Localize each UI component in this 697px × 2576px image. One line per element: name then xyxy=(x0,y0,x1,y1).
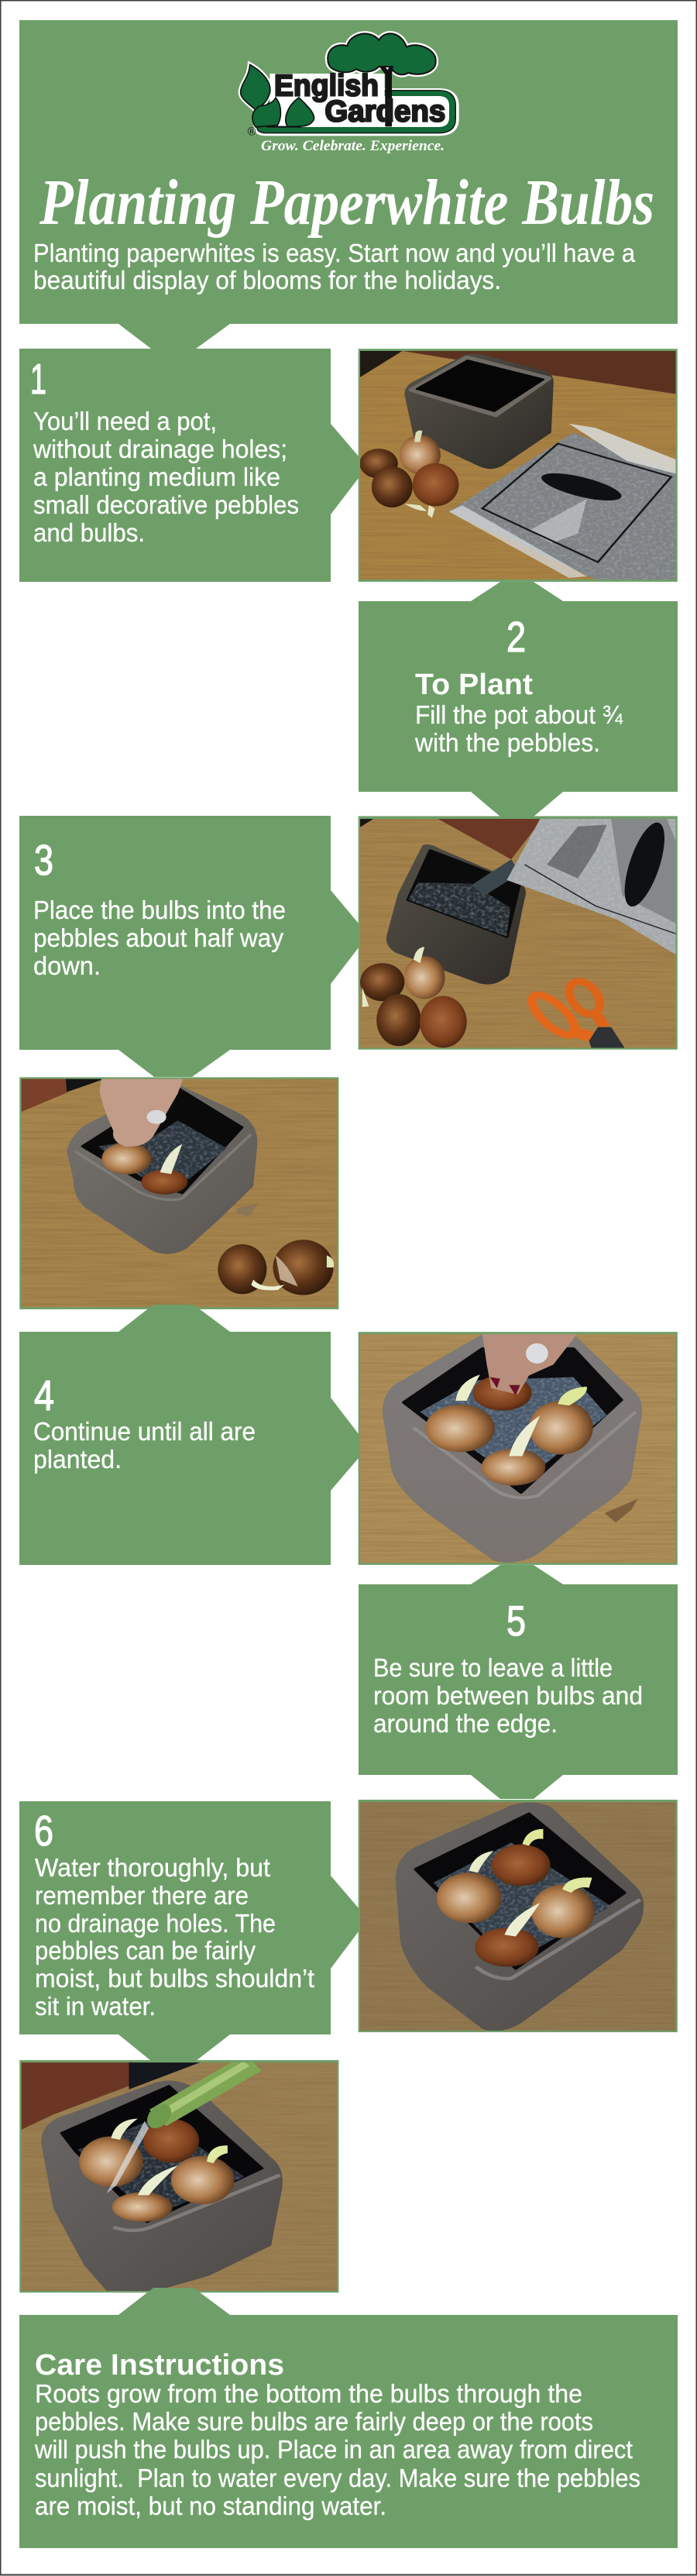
step number: 2 xyxy=(506,613,526,661)
step number: 1 xyxy=(30,355,46,403)
step text: room between bulbs and xyxy=(373,1681,643,1710)
photo 3: placing a bulb xyxy=(19,1077,338,1309)
step text: moist, but bulbs shouldn’t xyxy=(35,1964,314,1993)
care text: Roots grow from the bottom the bulbs through the xyxy=(35,2379,582,2408)
care text: pebbles. Make sure bulbs are fairly deep or the roots xyxy=(35,2407,593,2436)
step text xyxy=(373,1653,643,1738)
step text: around the edge. xyxy=(373,1709,558,1738)
intro text: beautiful display of blooms for the holidays. xyxy=(33,266,501,294)
panel: step 3 xyxy=(19,816,359,1077)
step heading: To Plant xyxy=(415,669,533,701)
photo 5: finished planting xyxy=(359,1800,678,2032)
step text: and bulbs. xyxy=(33,518,145,547)
panel: step 6 xyxy=(19,1801,359,2061)
step text: no drainage holes. The xyxy=(35,1909,276,1938)
step text: remember there are xyxy=(35,1881,249,1910)
step text: Water thoroughly, but xyxy=(35,1853,270,1882)
photo 4: all bulbs planted xyxy=(359,1332,678,1565)
step text: Place the bulbs into the xyxy=(33,896,286,924)
intro text xyxy=(33,239,636,294)
care text: sunlight. Plan to water every day. Make sure the pebbles xyxy=(35,2464,640,2492)
panel: step 2 xyxy=(359,582,678,817)
step text: with the pebbles. xyxy=(414,728,600,757)
step number: 3 xyxy=(34,836,53,884)
care text: will push the bulbs up. Place in an area away from direct xyxy=(34,2435,633,2464)
step text xyxy=(33,896,286,980)
care text xyxy=(34,2379,640,2520)
care text: are moist, but no standing water. xyxy=(35,2492,386,2520)
step text xyxy=(414,700,623,757)
step text xyxy=(35,1853,314,2021)
step text: small decorative pebbles xyxy=(33,490,299,519)
care heading: Care Instructions xyxy=(35,2349,284,2382)
panel: step 5 xyxy=(359,1565,678,1799)
logo: English Gardens: ® xyxy=(248,126,256,138)
photo 2: pouring pebbles xyxy=(359,816,678,1050)
step number: 6 xyxy=(34,1807,53,1855)
step text: Be sure to leave a little xyxy=(373,1653,613,1682)
step text xyxy=(33,1417,256,1474)
step number: 4 xyxy=(34,1371,54,1419)
step number: 5 xyxy=(506,1597,526,1645)
photo 1: supplies xyxy=(359,349,678,582)
step text: pebbles can be fairly xyxy=(35,1936,256,1965)
logo: English Gardens: Gardens xyxy=(324,95,445,129)
panel: step 1 xyxy=(19,349,359,582)
logo: English Gardens xyxy=(241,33,457,138)
step text: Fill the pot about ¾ xyxy=(415,700,623,729)
step text xyxy=(33,407,299,547)
logo: English Gardens: English xyxy=(274,68,379,102)
panel: care instructions xyxy=(19,2288,678,2548)
step text: a planting medium like xyxy=(33,463,280,491)
step text: planted. xyxy=(33,1445,122,1474)
panel: header xyxy=(19,20,678,349)
step text: pebbles about half way xyxy=(33,923,283,952)
step text: sit in water. xyxy=(35,1992,156,2021)
tagline: Grow. Celebrate. Experience. xyxy=(261,138,445,154)
step text: You’ll need a pot, xyxy=(33,407,217,435)
intro text: Planting paperwhites is easy. Start now and you’ll have a xyxy=(33,239,636,267)
panel: step 4 xyxy=(19,1305,359,1565)
step text: without drainage holes; xyxy=(33,435,287,463)
photo 6: watering xyxy=(19,2060,338,2292)
step text: down. xyxy=(33,951,101,980)
step text: Continue until all are xyxy=(33,1417,256,1446)
